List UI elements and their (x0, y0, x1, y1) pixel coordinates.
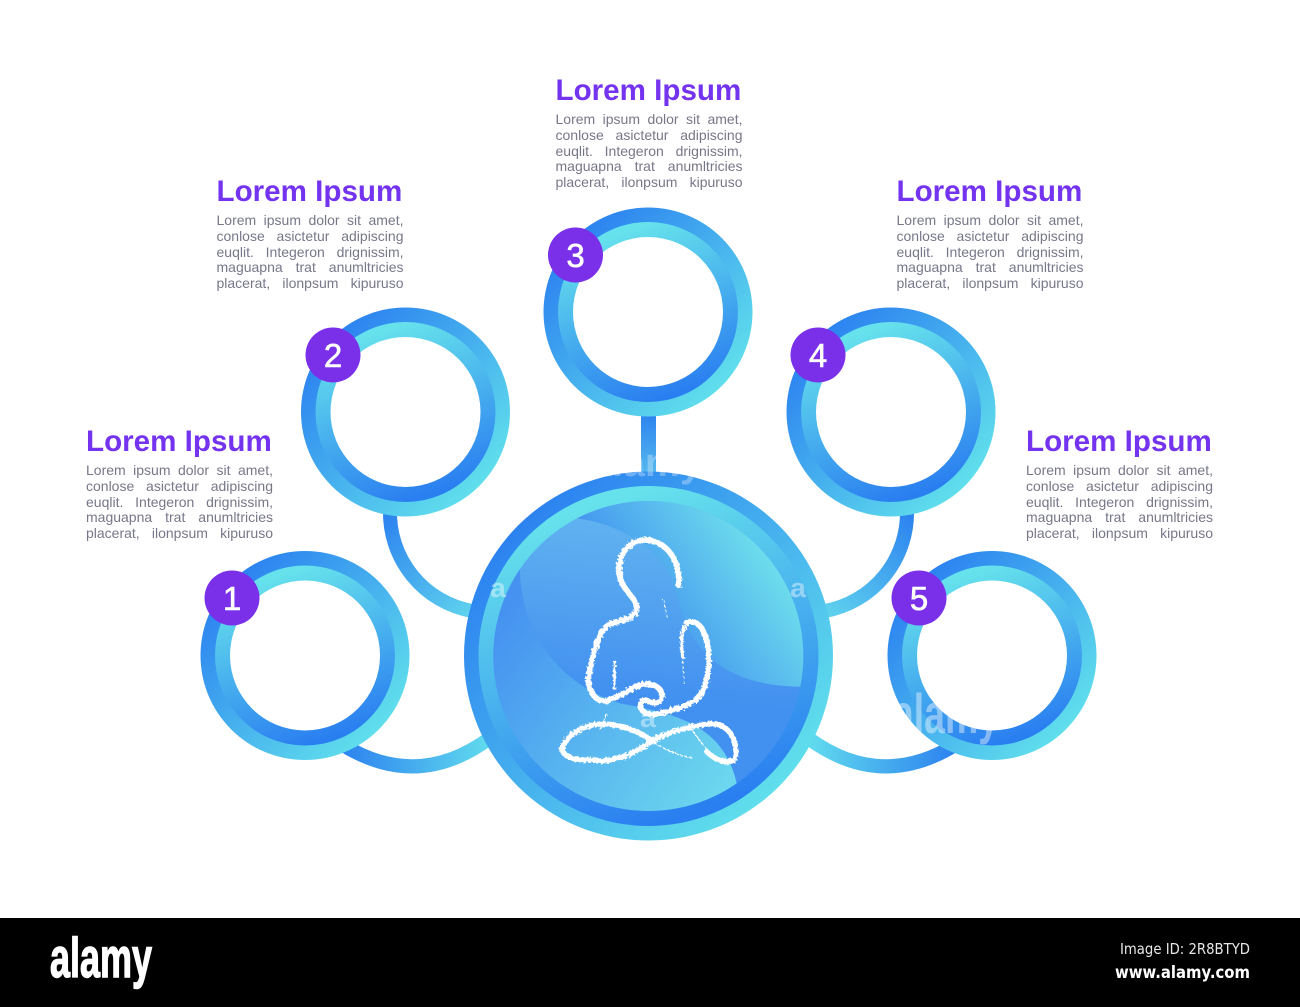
circle 3 (544, 208, 752, 416)
text block 3: placerat, ilonpsum kipuruso (556, 174, 742, 190)
badge 1 (204, 570, 260, 626)
badge 2: 2 (324, 337, 342, 374)
text block 2: conlose asictetur adipiscing (216, 228, 404, 244)
text block 3 (556, 74, 742, 190)
text block 4: conlose asictetur adipiscing (896, 228, 1084, 244)
text block 5: euqlit. Integeron drignissim, (1026, 494, 1213, 510)
text block 5 (1026, 425, 1213, 541)
badge 3 (548, 228, 603, 282)
text block 4: euqlit. Integeron drignissim, (896, 244, 1084, 260)
watermark marks: alamy (590, 441, 703, 485)
text block 5: conlose asictetur adipiscing (1026, 478, 1213, 494)
watermark marks: a (490, 573, 507, 603)
footer bar: alamy (50, 926, 152, 989)
text block 5: placerat, ilonpsum kipuruso (1026, 525, 1213, 541)
text block 5: Lorem Ipsum (1026, 425, 1212, 458)
text block 3: Lorem Ipsum (556, 74, 741, 107)
badge 4 (790, 328, 846, 382)
text block 2: maguapna trat anumltricies (216, 259, 404, 275)
text block 5: maguapna trat anumltricies (1026, 509, 1213, 525)
watermark marks: alamy (893, 682, 999, 745)
badge 2 (306, 328, 360, 382)
text block 3: euqlit. Integeron drignissim, (556, 143, 742, 159)
footer bar (0, 918, 1300, 1007)
text block 1: Lorem Ipsum (86, 425, 272, 458)
icon: meditating figure (562, 540, 736, 762)
circle 2 (301, 308, 510, 516)
text block 2: Lorem ipsum dolor sit amet, (216, 212, 404, 228)
connector: circle 2 to hub (390, 510, 472, 611)
connector: circle 1 to hub (343, 738, 490, 766)
central hub disk (493, 501, 804, 811)
circle 4 (786, 308, 996, 516)
connector: circle 5 to hub (808, 738, 955, 766)
circle 1 (200, 551, 410, 760)
watermark marks: a (790, 573, 807, 603)
badge 4: 4 (809, 337, 827, 374)
badge 1: 1 (223, 580, 241, 617)
text block 5: Lorem ipsum dolor sit amet, (1026, 462, 1213, 478)
text block 2: Lorem Ipsum (216, 175, 402, 208)
text block 1: maguapna trat anumltricies (86, 509, 273, 525)
text block 3: maguapna trat anumltricies (556, 158, 742, 174)
text block 3: conlose asictetur adipiscing (556, 127, 742, 143)
text block 1: euqlit. Integeron drignissim, (86, 494, 273, 510)
footer bar: www.alamy.com (1115, 963, 1250, 982)
footer bar: Image ID: 2R8BTYD (1120, 940, 1250, 958)
text block 4: placerat, ilonpsum kipuruso (896, 275, 1084, 291)
text block 4: Lorem ipsum dolor sit amet, (896, 212, 1084, 228)
text block 2: euqlit. Integeron drignissim, (216, 244, 404, 260)
badge 5: 5 (910, 580, 928, 617)
text block 4 (896, 175, 1084, 291)
connector: circle 4 to hub (825, 510, 907, 611)
text block 1 (86, 425, 273, 541)
text block 1: Lorem ipsum dolor sit amet, (86, 462, 273, 478)
infographic artwork (0, 208, 1300, 1007)
text block 1: conlose asictetur adipiscing (86, 478, 273, 494)
badge 5 (892, 570, 946, 626)
text block 4: maguapna trat anumltricies (896, 259, 1084, 275)
text block 4: Lorem Ipsum (896, 175, 1082, 208)
circle 5 (888, 551, 1096, 760)
connector: circle 3 to hub (641, 412, 656, 476)
watermark marks: a (640, 703, 657, 733)
watermark marks (490, 441, 999, 745)
central hub rings (464, 472, 833, 840)
text block 2 (216, 175, 404, 291)
text block 1: placerat, ilonpsum kipuruso (86, 525, 273, 541)
badge 3: 3 (566, 237, 585, 274)
text block 3: Lorem ipsum dolor sit amet, (556, 111, 742, 127)
text block 2: placerat, ilonpsum kipuruso (216, 275, 404, 291)
